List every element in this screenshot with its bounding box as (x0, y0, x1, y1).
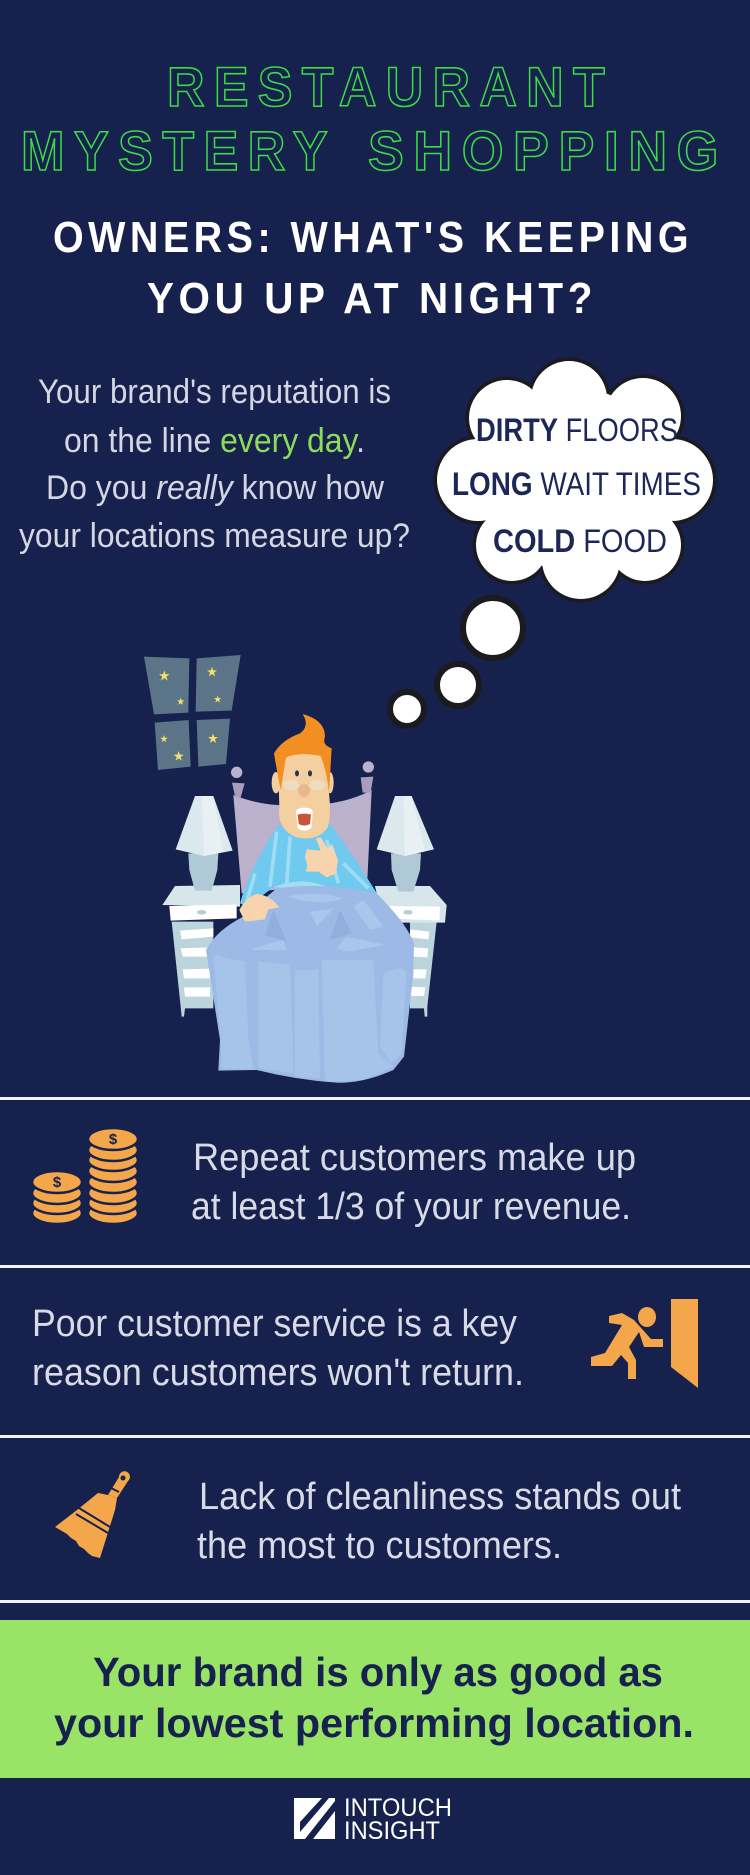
man: head (272, 714, 334, 838)
text: cleanliness: the most to customers. (197, 1525, 562, 1567)
man: pajamas (240, 823, 377, 907)
panel: customer service (32, 1299, 698, 1394)
title (21, 55, 728, 182)
lamps (176, 796, 434, 892)
intro text: Your brand's reputation is (38, 373, 391, 411)
nightstands (162, 885, 447, 1017)
text: repeat customers (191, 1137, 636, 1228)
window with stars (144, 655, 241, 770)
cloud text: COLD FOOD (493, 523, 667, 559)
logo wordmark: INSIGHT (344, 1817, 440, 1845)
icon: coin stacks: $ (53, 1174, 62, 1191)
panel: green callout band (0, 1620, 750, 1778)
man: hand on chest (305, 837, 338, 877)
text: cleanliness: Lack of cleanliness stands out (199, 1476, 681, 1518)
logo: Intouch Insight (294, 1794, 452, 1845)
callout text: Your brand is only as good as (93, 1649, 663, 1695)
title: RESTAURANT (167, 55, 614, 118)
divider lines (0, 1097, 750, 1603)
subtitle: YOU UP AT NIGHT? (147, 274, 597, 323)
text: customer service: Poor customer service is a key (32, 1303, 517, 1345)
text: customer service (32, 1303, 524, 1394)
man: hand on blanket (239, 894, 279, 922)
logo wordmark (344, 1794, 452, 1845)
logo mark (294, 1798, 335, 1839)
text: repeat customers: Repeat customers make up (193, 1137, 636, 1179)
title: MYSTERY (21, 119, 337, 182)
intro text: on the line every day. (64, 422, 365, 460)
callout text: your lowest performing location. (54, 1700, 694, 1746)
icon: coin stacks: $ (109, 1131, 118, 1148)
thought cloud (437, 361, 713, 599)
headboard (231, 761, 374, 893)
cloud text: DIRTY FLOORS (476, 412, 678, 448)
text: cleanliness (197, 1476, 681, 1567)
intro text: Do you really know how (46, 469, 384, 507)
illustration: man awake in bed (144, 655, 447, 1083)
intro text: your locations measure up? (19, 517, 410, 555)
intro text (19, 373, 410, 555)
icon: broom (55, 1471, 130, 1558)
subtitle (53, 213, 693, 323)
blanket (206, 886, 414, 1083)
subtitle: OWNERS: WHAT'S KEEPING (53, 213, 693, 262)
logo wordmark: INTOUCH (344, 1794, 452, 1822)
cloud text: LONG WAIT TIMES (452, 466, 701, 502)
icon: coin stacks (32, 1128, 138, 1224)
thought bubbles (390, 598, 523, 726)
icon: person running out door (591, 1299, 698, 1388)
text: repeat customers: at least 1/3 of your revenue. (191, 1186, 631, 1228)
panel: repeat customers (32, 1128, 636, 1228)
title: SHOPPING (368, 119, 728, 182)
callout text (54, 1649, 694, 1746)
panel: cleanliness (55, 1471, 681, 1567)
cloud text (452, 412, 701, 559)
text: customer service: reason customers won't return. (32, 1352, 524, 1394)
